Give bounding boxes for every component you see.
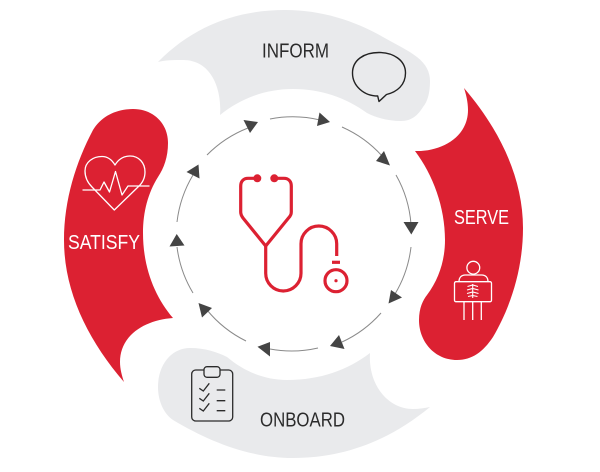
- icon: x-ray person: [454, 261, 492, 320]
- heading: inform: INFORM: [262, 40, 329, 62]
- panel: onboard: [158, 348, 430, 458]
- heading: serve: SERVE: [454, 207, 509, 229]
- icon: heart with pulse: [82, 156, 150, 210]
- icon: speech bubble: [352, 52, 406, 102]
- panel: satisfy: [64, 109, 173, 382]
- panel: serve: [415, 88, 523, 360]
- panel: inform: [158, 10, 430, 121]
- heading: onboard: ONBOARD: [260, 410, 345, 432]
- heading: satisfy: SATISFY: [68, 232, 140, 254]
- icon: stethoscope: [241, 174, 347, 292]
- ring of arrows: [170, 112, 418, 356]
- icon: clipboard checklist: [192, 367, 233, 421]
